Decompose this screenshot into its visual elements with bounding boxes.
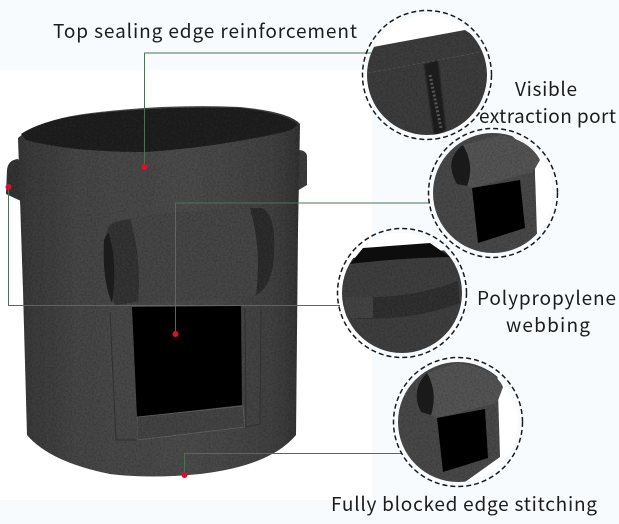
label: polypropylene webbing	[477, 284, 616, 338]
label: visible extraction port: Visible	[515, 75, 577, 102]
leader line: webbing	[8, 190, 340, 306]
bag opening interior	[21, 108, 297, 152]
detail circle: extraction port	[428, 128, 558, 260]
detail circle: webbing	[338, 228, 466, 360]
label: polypropylene webbing: webbing	[506, 311, 590, 338]
rolled flap	[104, 208, 274, 305]
marker dot: top sealing edge	[142, 164, 148, 170]
right handle	[297, 150, 307, 191]
marker dot: extraction port	[172, 331, 178, 337]
detail circle: edge stitching	[394, 358, 522, 486]
marker dot: edge stitching	[182, 472, 188, 478]
marker dot: webbing	[6, 184, 12, 190]
leader line: edge stitching	[184, 454, 401, 473]
detail circle: top sealing edge	[362, 10, 495, 140]
grow bag product photo	[6, 106, 307, 476]
label: visible extraction port	[479, 75, 616, 129]
label: polypropylene webbing: Polypropylene	[477, 284, 616, 311]
extraction window	[132, 306, 242, 417]
product photo backdrop	[0, 70, 372, 500]
leader line: top sealing edge	[144, 53, 371, 165]
window frame stitching	[110, 308, 261, 440]
label: fully blocked edge stitching: Fully blocked edge stitching	[331, 490, 597, 517]
left handle	[6, 159, 40, 210]
window lower panel	[137, 406, 245, 440]
leader line: extraction port	[176, 203, 429, 332]
bag body	[18, 106, 300, 476]
label: visible extraction port: extraction port	[479, 102, 616, 129]
label: top sealing edge: Top sealing edge reinforcement	[53, 17, 357, 44]
